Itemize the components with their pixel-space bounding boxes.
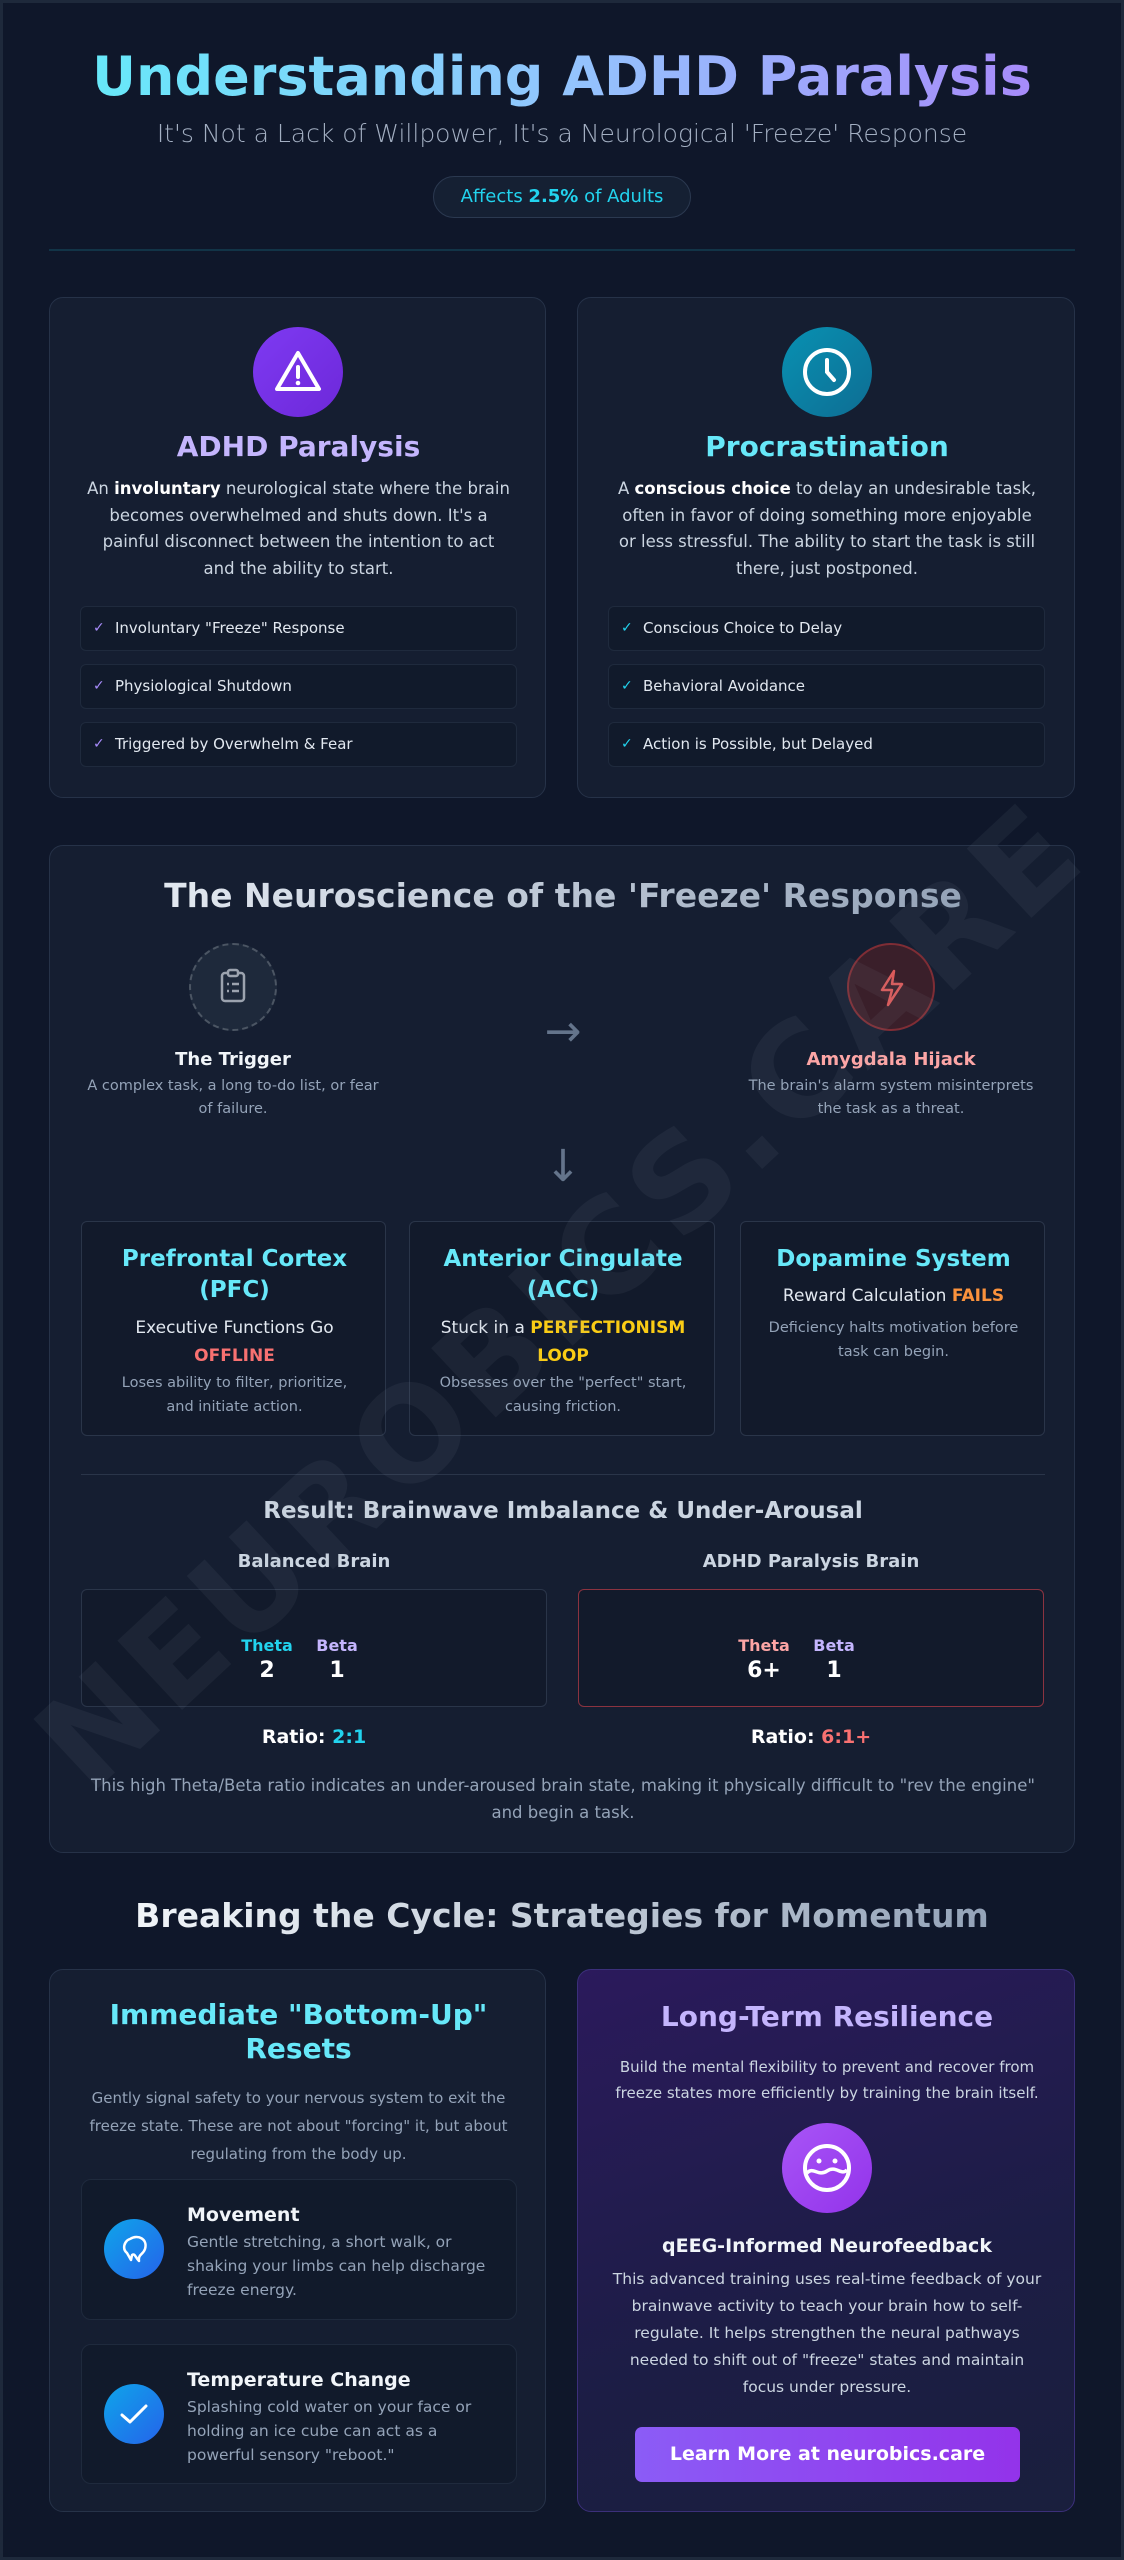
icon: movement <box>104 2219 164 2279</box>
amygdala <box>748 943 1033 1117</box>
result heading: Result: Brainwave Imbalance & Under-Arousal <box>263 1498 863 1524</box>
box: PFC <box>81 1221 386 1436</box>
list: Involuntary "Freeze" Response <box>115 619 345 637</box>
box: PFC: (PFC) <box>199 1277 270 1303</box>
trigger <box>87 943 379 1117</box>
box: dopamine: Reward Calculation FAILS <box>783 1286 1004 1306</box>
strategy: temperature: Temperature Change <box>187 2369 411 2391</box>
ADHD brain: Theta <box>738 1636 790 1655</box>
description: A conscious choice to delay an undesirable task, often in favor of doing something more enjoyable or less stressful. The ability to start the task is still there, just postponed. <box>618 479 1036 578</box>
list: ✓ <box>93 736 105 752</box>
badge: Affects 2.5% of Adults <box>461 186 663 207</box>
icon: check <box>104 2384 164 2444</box>
amygdala: The brain's alarm system misinterprets the task as a threat. <box>749 1078 1033 1117</box>
box: ACC <box>409 1221 715 1436</box>
subtitle: It's Not a Lack of Willpower, It's a Neurological 'Freeze' Response <box>157 119 967 148</box>
description: Gently signal safety to your nervous system to exit the freeze state. These are not about "forcing" it, but about regulating from the body up. <box>90 2089 507 2163</box>
balanced brain: 2 <box>259 1658 275 1683</box>
heading: Immediate "Bottom-Up" <box>110 1998 487 2031</box>
balanced brain: Beta <box>316 1636 358 1655</box>
panel: long-term resilience <box>577 1969 1075 2512</box>
box: ACC: (ACC) <box>527 1277 599 1303</box>
description: Build the mental flexibility to prevent and recover from freeze states more efficiently by training the brain itself. <box>615 2058 1039 2102</box>
title: Understanding ADHD Paralysis <box>92 45 1032 108</box>
icon: clock <box>782 327 872 417</box>
box: PFC: Prefrontal Cortex <box>122 1246 347 1272</box>
balanced brain: Balanced Brain <box>238 1551 390 1572</box>
strategy: movement: Gentle stretching, a short walk, or shaking your limbs can help discharge freeze energy. <box>187 2233 485 2299</box>
footnote: This high Theta/Beta ratio indicates an under-aroused brain state, making it physically difficult to "rev the engine" and begin a task. <box>91 1776 1035 1822</box>
list <box>608 606 1045 767</box>
balanced brain: Ratio: 2:1 <box>262 1726 366 1748</box>
button: Learn More at neurobics.care <box>670 2443 985 2465</box>
heading: Long-Term Resilience <box>661 2000 993 2033</box>
icon: clipboard <box>189 943 277 1031</box>
panel: long-term resilience: This advanced training uses real-time feedback of your brainwave activity to teach your brain how to self-​regulate. It helps strengthen the neural pathways needed to shift out of "freeze" states and maintain focus under pressure. <box>613 2270 1041 2396</box>
list: ✓ <box>621 620 633 636</box>
panel: bottom-up resets <box>49 1969 546 2512</box>
panel: ADHD paralysis <box>49 297 546 798</box>
list: ✓ <box>93 678 105 694</box>
watermark: NEUROBICS.CARE <box>7 773 1113 1819</box>
heading: ADHD Paralysis <box>177 430 420 463</box>
description: An involuntary neurological state where the brain becomes overwhelmed and shuts down. It's a painful disconnect between the intention to act and the ability to start. <box>87 479 510 578</box>
balanced brain: 1 <box>329 1658 345 1683</box>
strategy: movement <box>81 2179 517 2320</box>
heading <box>110 1998 487 2065</box>
ADHD brain: Ratio: 6:1+ <box>751 1726 871 1748</box>
trigger: The Trigger <box>175 1049 291 1070</box>
icon: lightning <box>847 943 935 1031</box>
list: Behavioral Avoidance <box>643 677 805 695</box>
heading: Procrastination <box>705 430 949 463</box>
list: ✓ <box>93 620 105 636</box>
section heading: strategies: Breaking the Cycle: Strategies for Momentum <box>135 1896 989 1935</box>
list: Action is Possible, but Delayed <box>643 735 873 753</box>
list: ✓ <box>621 678 633 694</box>
balanced brain <box>81 1551 547 1748</box>
strategy: movement: Movement <box>187 2204 300 2226</box>
panel: procrastination <box>577 297 1075 798</box>
box: ACC: Anterior Cingulate <box>443 1246 683 1272</box>
button <box>635 2427 1020 2482</box>
heading: The Neuroscience of the 'Freeze' Response <box>164 876 962 915</box>
list <box>80 606 517 767</box>
arrow down: ↓ <box>545 1141 581 1192</box>
ADHD brain: 1 <box>826 1658 842 1683</box>
box: PFC: OFFLINE <box>194 1346 275 1366</box>
list: Conscious Choice to Delay <box>643 619 842 637</box>
strategy: temperature: Splashing cold water on your face or holding an ice cube can act as a powerful sensory "reboot." <box>187 2398 471 2464</box>
icon: brain face <box>782 2123 872 2213</box>
box: PFC: Loses ability to filter, prioritize, and initiate action. <box>122 1375 347 1415</box>
ADHD brain <box>578 1551 1044 1748</box>
arrow right: → <box>545 1006 581 1057</box>
ADHD brain: 6+ <box>747 1658 781 1683</box>
box: PFC: Executive Functions Go <box>135 1318 334 1338</box>
box: ACC: Stuck in a PERFECTIONISM LOOP <box>441 1318 685 1366</box>
balanced brain: Theta <box>241 1636 293 1655</box>
list: ✓ <box>621 736 633 752</box>
box: ACC: Obsesses over the "perfect" start, causing friction. <box>440 1375 686 1415</box>
list: Physiological Shutdown <box>115 677 292 695</box>
badge <box>433 176 691 218</box>
box: dopamine: Deficiency halts motivation before task can begin. <box>769 1320 1018 1360</box>
ADHD brain: Beta <box>813 1636 855 1655</box>
strategy: temperature <box>81 2344 517 2484</box>
ADHD brain: ADHD Paralysis Brain <box>703 1551 919 1572</box>
heading: Resets <box>245 2032 352 2065</box>
neurofeedback: qEEG-Informed Neurofeedback <box>662 2235 992 2257</box>
trigger: A complex task, a long to-do list, or fear of failure. <box>87 1078 379 1117</box>
amygdala: Amygdala Hijack <box>806 1049 976 1070</box>
box: dopamine <box>740 1221 1045 1436</box>
box: dopamine: Dopamine System <box>776 1246 1011 1272</box>
icon: warning <box>253 327 343 417</box>
panel: neuroscience <box>49 845 1075 1853</box>
list: Triggered by Overwhelm & Fear <box>115 735 353 753</box>
